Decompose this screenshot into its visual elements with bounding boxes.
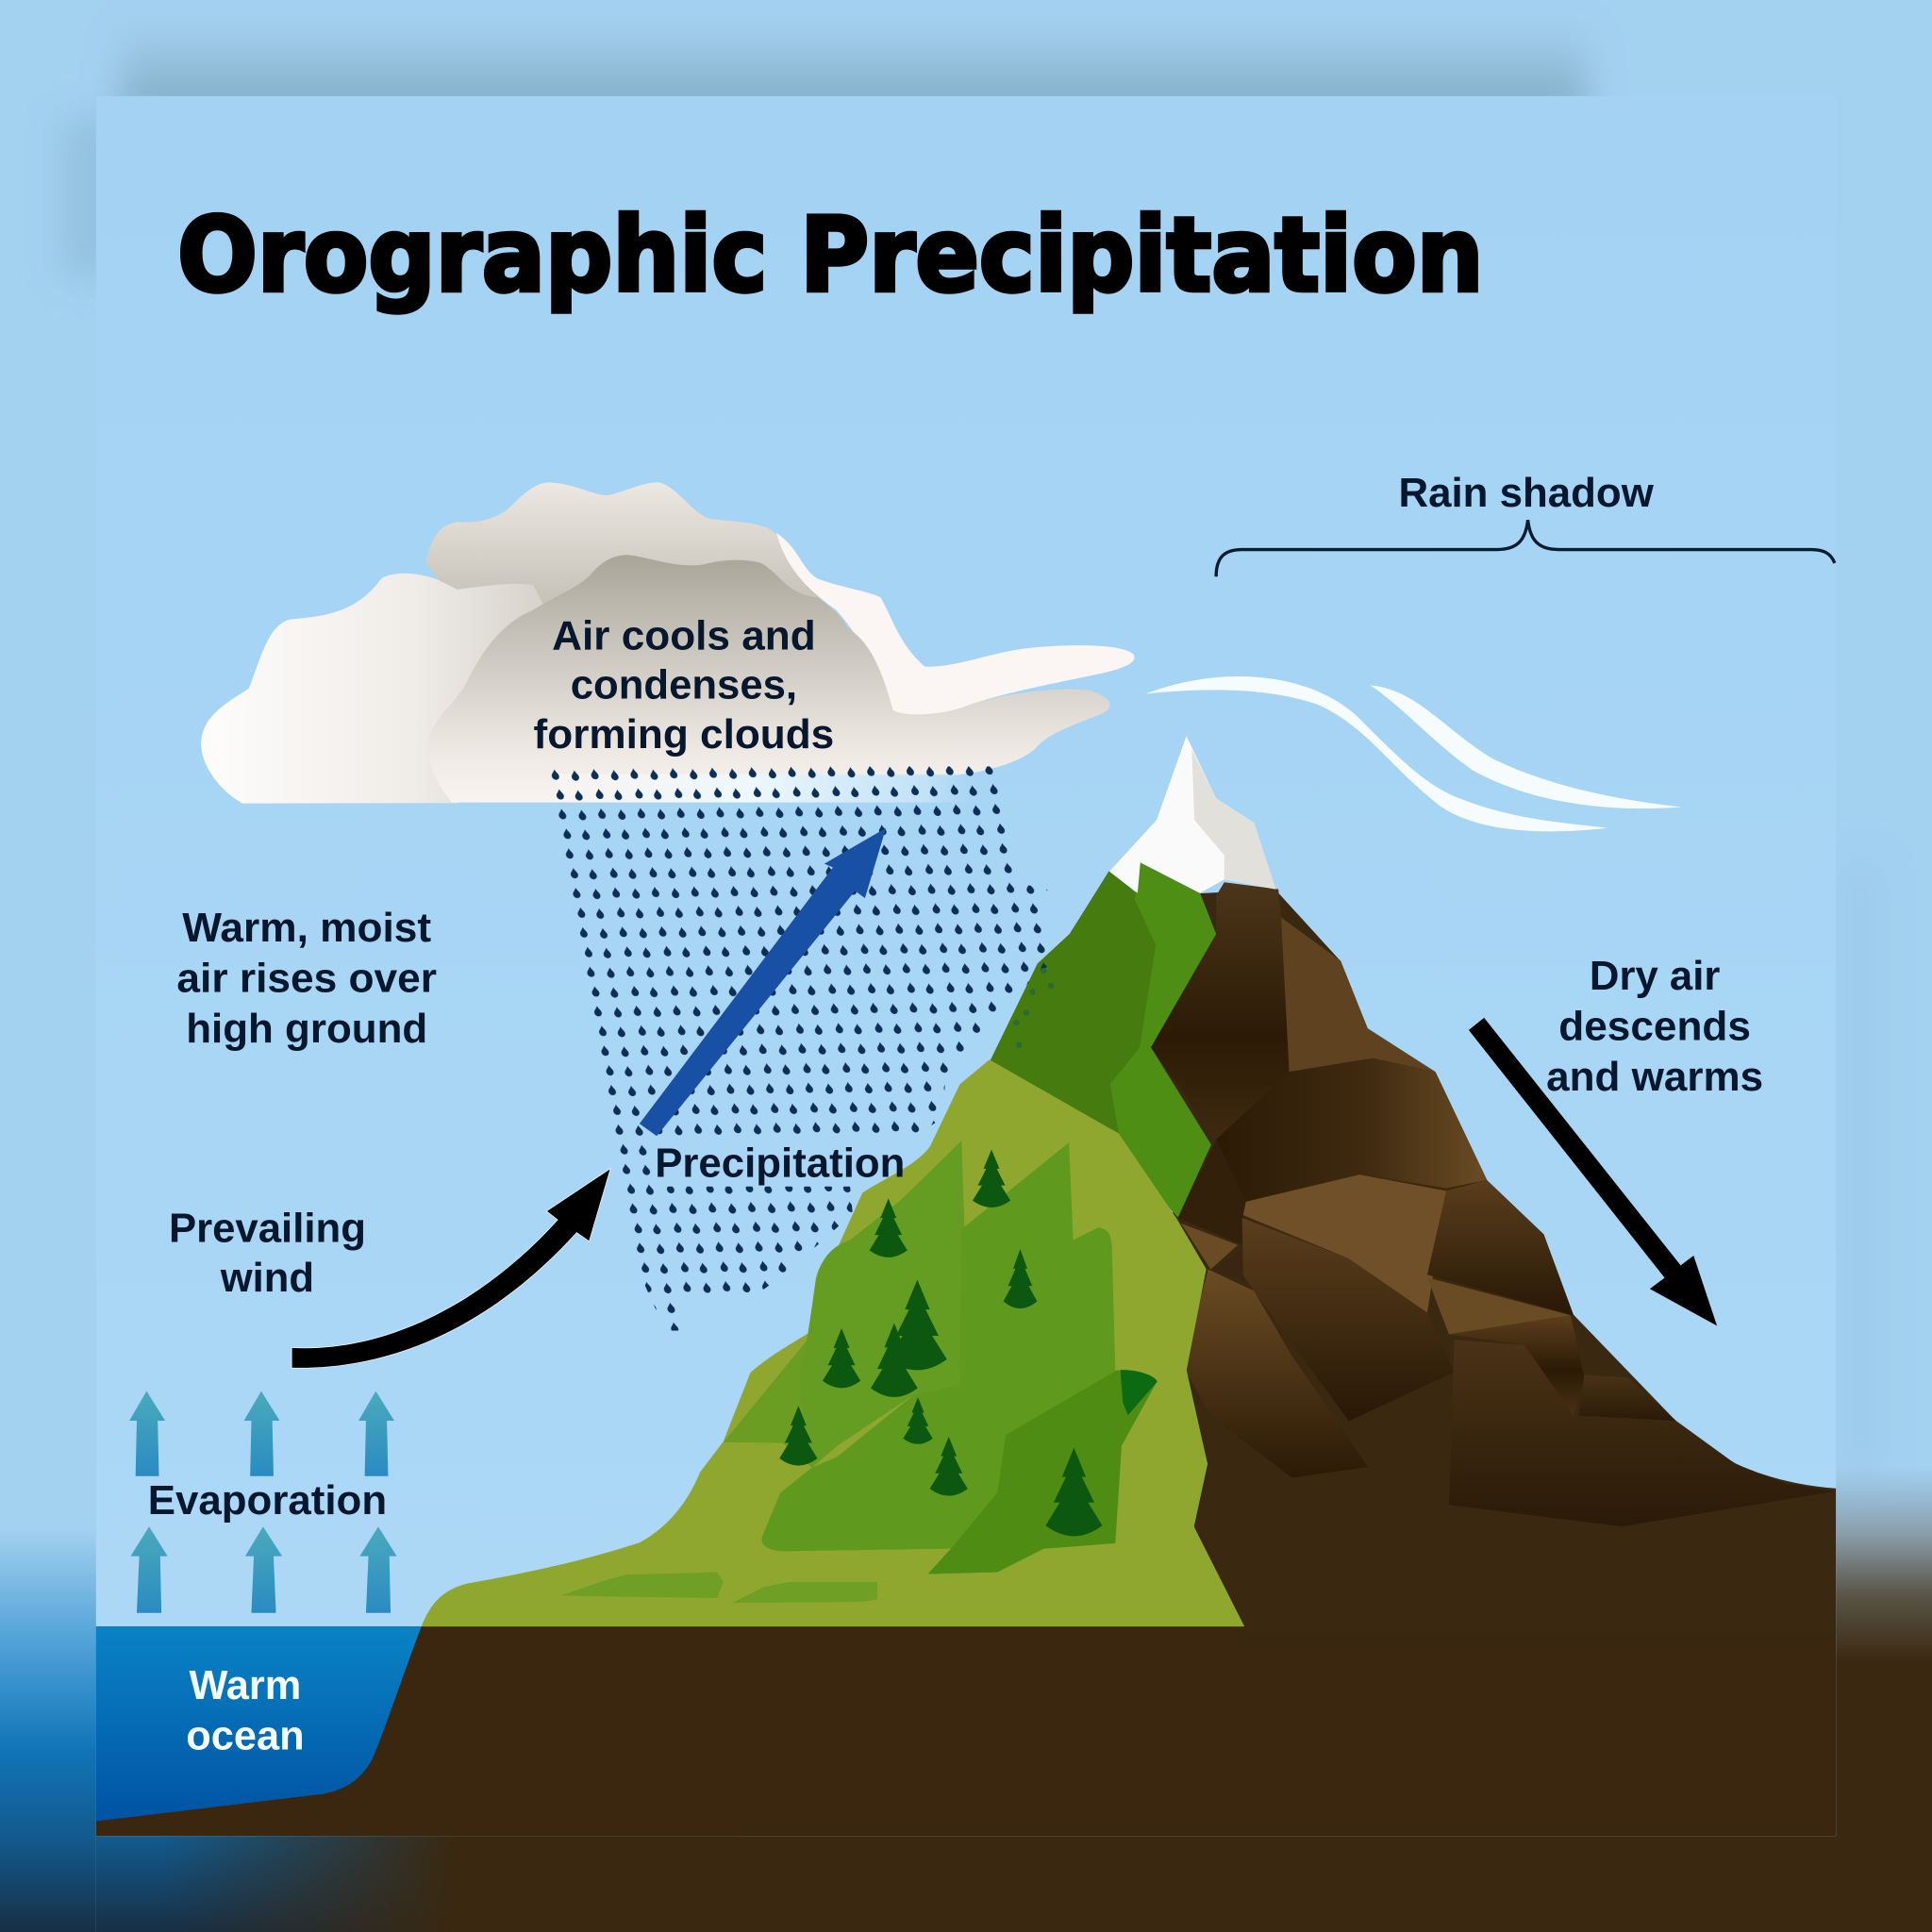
label: warm ocean (186, 1662, 305, 1759)
label: prevailing wind (169, 1206, 366, 1301)
label: air cools: forming clouds (534, 711, 834, 758)
rain shadow bracket (1216, 520, 1835, 576)
label: dry air (1546, 953, 1763, 1100)
mountain: lower slope (422, 1059, 1244, 1626)
label: warm moist air: air rises over (176, 955, 437, 1001)
label: warm ocean: ocean (186, 1713, 305, 1759)
arrow: descending dry air (1469, 1018, 1717, 1325)
label: dry air: and warms (1546, 1054, 1763, 1100)
evaporation arrows (129, 1391, 397, 1613)
label: precipitation: Precipitation (655, 1140, 905, 1186)
label: dry air: descends (1558, 1003, 1751, 1049)
arrow: prevailing wind (292, 1170, 610, 1368)
label: air cools: Air cools and (552, 612, 816, 658)
trees (779, 1150, 1102, 1536)
title: Orographic Precipitation (177, 195, 1484, 315)
label: warm moist air: Warm, moist (182, 905, 432, 951)
label: air cools (534, 612, 834, 758)
label: prevailing wind: Prevailing (169, 1206, 366, 1252)
arrow: rising moist air (640, 828, 886, 1136)
grass patches (560, 1573, 877, 1603)
snow cap (1109, 736, 1275, 893)
mountain: upper forest slope (990, 862, 1216, 1217)
rain drops (551, 766, 1055, 1331)
label: warm moist air (176, 905, 437, 1052)
label: air cools: condenses, (571, 662, 797, 708)
label: evaporation: Evaporation (148, 1477, 387, 1524)
label: warm moist air: high ground (186, 1006, 427, 1052)
label: rain shadow: Rain shadow (1398, 470, 1655, 516)
wind wisps (1146, 676, 1682, 831)
mountain: rocky dry side (1146, 882, 1836, 1633)
ground (96, 1626, 1836, 1836)
label: dry air: Dry air (1590, 953, 1720, 999)
label: prevailing wind: wind (220, 1255, 314, 1301)
label: warm ocean: Warm (189, 1662, 301, 1708)
ocean (96, 1626, 422, 1821)
cloud (201, 482, 1134, 804)
